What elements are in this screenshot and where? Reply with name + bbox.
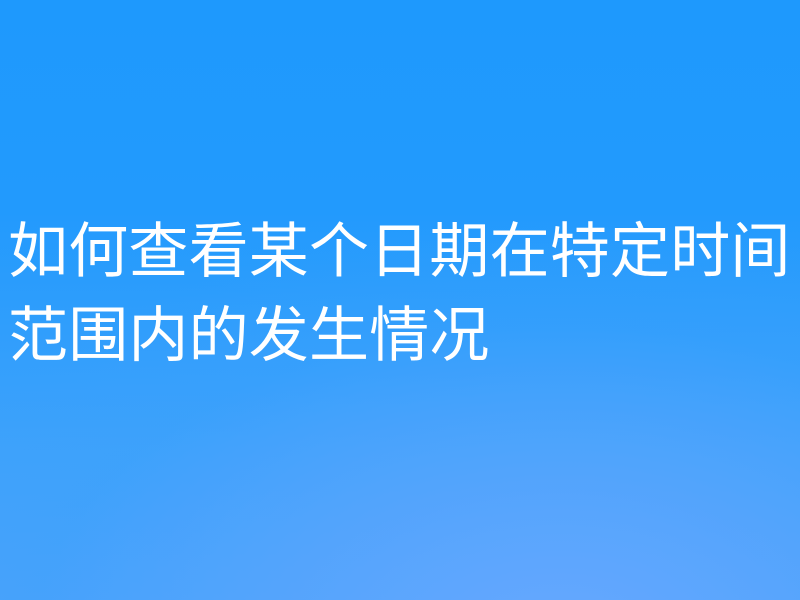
title: 如何查看某个日期在特定时间 xyxy=(8,218,791,285)
title xyxy=(8,218,791,369)
title: 范围内的发生情况 xyxy=(8,302,490,369)
